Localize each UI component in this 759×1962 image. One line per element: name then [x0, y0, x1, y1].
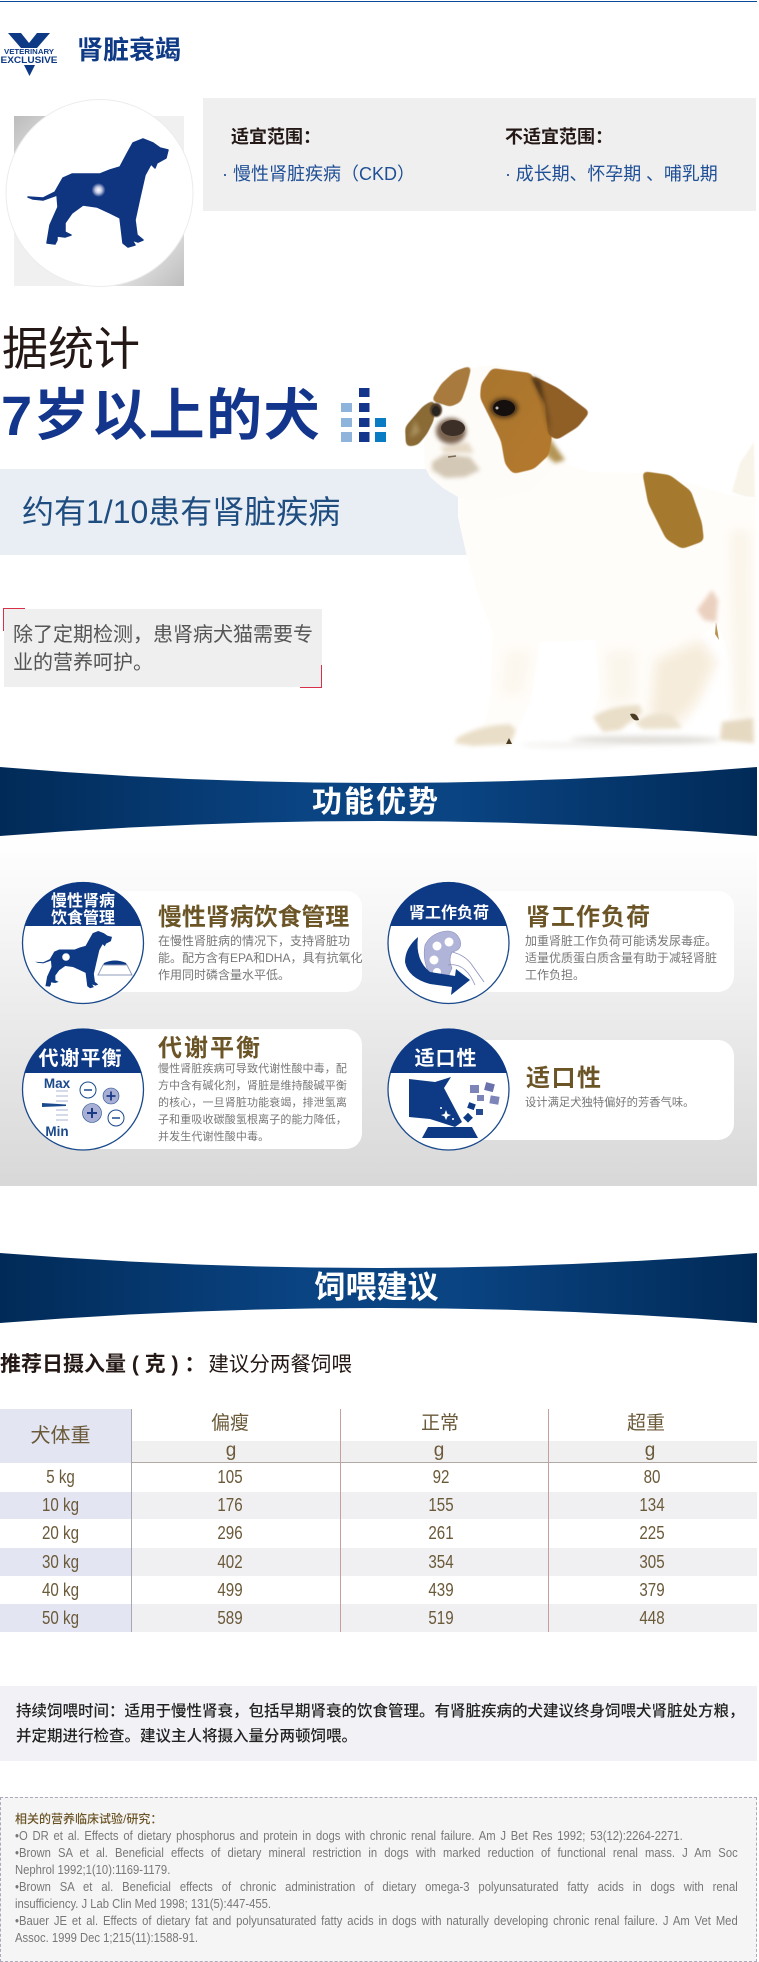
callout text	[13, 624, 313, 674]
row 10 kg	[0, 1492, 757, 1519]
column rule 1	[131, 1409, 132, 1632]
stat band	[0, 469, 480, 555]
panel: function advantages	[0, 838, 757, 1186]
photo: puppy	[404, 366, 756, 748]
card text: 并发生代谢性酸中毒。	[158, 1131, 269, 1143]
reference 3 continued: insufficiency. J Lab Clin Med 1998; 131(5):447-455.	[15, 1897, 271, 1911]
banner: function advantages	[0, 767, 757, 836]
reference 2: •Brown SA et al. Beneficial effects of dietary mineral restriction in dogs with marked reduction of functional renal mass. J Am Soc	[15, 1846, 738, 1860]
reference 2 continued: Nephrol 1992;1(10):1169-1179.	[15, 1863, 170, 1877]
card: palatability	[449, 1040, 734, 1140]
reference 4 continued: Assoc. 1999 Dec 1;215(11):1588-91.	[15, 1931, 198, 1945]
header cell: dog weight	[0, 1409, 131, 1463]
row 40 kg	[42, 1580, 665, 1600]
row 20 kg: 261	[428, 1523, 454, 1543]
row 30 kg: 30 kg	[42, 1552, 79, 1572]
row 50 kg	[0, 1604, 757, 1632]
unit row background	[131, 1441, 757, 1462]
card text: 的核心，一旦肾脏功能衰竭，排泄氢离	[158, 1097, 347, 1109]
heading: not suitable range: 不适宜范围：	[505, 127, 613, 147]
right ear	[528, 373, 590, 440]
row 5 kg: 5 kg	[46, 1467, 75, 1487]
row 5 kg	[46, 1467, 660, 1487]
corner: bottom right	[300, 665, 322, 688]
unit: normal: g	[434, 1440, 444, 1461]
item: not suitable conditions: · 成长期、怀孕期 、哺乳期	[505, 164, 718, 184]
unit: overweight: g	[645, 1440, 655, 1461]
left brown patch	[431, 365, 472, 407]
logo: veterinary exclusive	[0, 33, 58, 76]
body shading	[650, 640, 716, 722]
references heading: 相关的营养临床试验/研究：	[15, 1812, 162, 1826]
card: diet management	[83, 891, 362, 992]
card text	[158, 934, 362, 982]
icon badge: kidney workload	[387, 882, 510, 1004]
row 30 kg: 402	[217, 1552, 243, 1572]
card: kidney workload	[449, 891, 734, 992]
row 10 kg: 155	[428, 1495, 454, 1515]
row 10 kg: 134	[639, 1495, 665, 1515]
row 40 kg: 439	[428, 1580, 454, 1600]
column rule 3	[548, 1409, 549, 1632]
icon badge: palatability: 适口性	[414, 1047, 478, 1070]
icon badge: diet management	[22, 882, 144, 1004]
card text: 方中含有碱化剂，肾脏是维持酸碱平衡	[158, 1080, 347, 1092]
feeding duration text: 持续饲喂时间：适用于慢性肾衰，包括早期肾衰的饮食管理。有肾脏疾病的犬建议终身饲喂犬肾脏处方粮，	[16, 1703, 745, 1720]
unit: lean: g	[226, 1440, 236, 1461]
row 10 kg: 10 kg	[42, 1495, 79, 1515]
item: suitable condition: · 慢性肾脏疾病（CKD）	[222, 164, 415, 184]
icon badge: metabolic balance: Min	[45, 1124, 69, 1139]
column rule 2	[340, 1409, 341, 1632]
card title: 肾工作负荷	[526, 904, 651, 931]
row 10 kg: 176	[217, 1495, 243, 1515]
row 50 kg: 448	[639, 1608, 665, 1628]
banner: function advantages: 功能优势	[312, 786, 440, 819]
icon badge: diet management: 慢性肾病	[51, 891, 115, 910]
title: kidney failure: 肾脏衰竭	[77, 35, 181, 65]
heading: dogs over seven: 7岁以上的犬	[1, 384, 321, 447]
icon badge: kidney workload: 肾工作负荷	[409, 903, 489, 922]
callout text: 业的营养呵护。	[13, 652, 153, 674]
card text: 能。配方含有EPA和DHA，具有抗氧化	[158, 951, 362, 965]
icon badge: metabolic balance	[22, 1028, 144, 1151]
icon badge: palatability	[387, 1028, 510, 1151]
header: lean: 偏瘦	[211, 1413, 249, 1434]
head	[424, 365, 558, 502]
icon: dog silhouette in circle	[6, 99, 194, 287]
row 5 kg: 80	[644, 1467, 660, 1487]
feeding duration text	[16, 1702, 745, 1745]
icon badge: metabolic balance: Max	[44, 1076, 71, 1091]
card title: 代谢平衡	[158, 1035, 262, 1062]
logo: veterinary exclusive: VETERINARY	[4, 47, 54, 56]
stat text: one in ten: 约有1/10患有肾脏疾病	[22, 494, 340, 530]
header cell: dog weight: 犬体重	[30, 1425, 90, 1447]
row 30 kg: 354	[428, 1552, 454, 1572]
paws	[455, 724, 516, 746]
card text: 工作负担。	[525, 968, 585, 982]
heading: recommended daily intake: 推荐日摄入量 ( 克 ) ：建议分两餐饲喂	[0, 1353, 352, 1376]
card text: 设计满足犬独特偏好的芳香气味。	[525, 1097, 694, 1109]
panel: suitability	[203, 98, 756, 211]
back patch	[642, 471, 704, 549]
right brown patch	[480, 368, 552, 474]
nose	[436, 418, 466, 444]
table: feeding amounts	[0, 1409, 757, 1632]
row 20 kg: 225	[639, 1523, 665, 1543]
heading: suitable range: 适宜范围：	[231, 127, 321, 147]
card text: 加重肾脏工作负荷可能诱发尿毒症。	[525, 934, 717, 948]
callout: nutrition care	[3, 608, 322, 688]
row 20 kg: 296	[217, 1523, 243, 1543]
heading: according to statistics: 据统计	[2, 323, 140, 375]
header: normal: 正常	[421, 1413, 459, 1434]
row 30 kg: 305	[639, 1552, 665, 1572]
feeding duration text: 并定期进行检查。建议主人将摄入量分两顿饲喂。	[16, 1728, 357, 1745]
callout text: 除了定期检测，患肾病犬猫需要专	[13, 624, 313, 646]
row 50 kg: 50 kg	[42, 1608, 79, 1628]
banner: feeding advice: 饲喂建议	[314, 1270, 438, 1305]
panel: feeding duration	[0, 1686, 757, 1761]
row 20 kg	[42, 1523, 665, 1543]
icon badge: diet management: 饮食管理	[51, 908, 115, 927]
ground shadow	[570, 736, 720, 744]
panel: references	[0, 1797, 757, 1962]
muzzle fur	[432, 454, 480, 478]
eyes	[490, 398, 518, 418]
icon badge: metabolic balance: 代谢平衡	[38, 1047, 122, 1070]
row 30 kg	[0, 1548, 757, 1576]
callout background	[4, 609, 322, 687]
card text	[525, 934, 717, 982]
row 20 kg: 20 kg	[42, 1523, 79, 1543]
reference 1: •O DR et al. Effects of dietary phosphorus and protein in dogs with chronic renal failure. Am J Bet Res 1992; 53(12):2264-2271.	[15, 1829, 683, 1843]
card title: 适口性	[526, 1065, 602, 1092]
card text: 作用同时磷含量水平低。	[158, 968, 290, 982]
corner: top left	[3, 608, 25, 631]
reference 4: •Bauer JE et al. Effects of dietary fat and polyunsaturated fatty acids in dogs with naturally developing chronic renal failure. J Am Vet Med	[15, 1914, 738, 1928]
row 40 kg: 40 kg	[42, 1580, 79, 1600]
row 5 kg: 105	[217, 1467, 243, 1487]
card text	[158, 1062, 347, 1143]
reference 3: •Brown SA et al. Beneficial effects of chronic administration of dietary omega-3 polyunsaturated fatty acids in dogs with renal	[15, 1880, 738, 1894]
card text: 在慢性肾脏病的情况下，支持肾脏功	[158, 934, 350, 948]
header line	[131, 1462, 757, 1463]
icon: pixel squares	[341, 388, 386, 442]
top rule	[0, 1, 757, 2]
card text: 子和重吸收碳酸氢根离子的能力降低，	[158, 1114, 347, 1126]
neck brown	[546, 436, 565, 463]
row 40 kg: 379	[639, 1580, 665, 1600]
logo: veterinary exclusive: EXCLUSIVE	[0, 55, 58, 66]
row 50 kg: 519	[428, 1608, 454, 1628]
body	[455, 440, 755, 746]
card: metabolic balance	[83, 1029, 362, 1149]
row 5 kg: 92	[433, 1467, 449, 1487]
card text: 慢性肾脏疾病可导致代谢性酸中毒，配	[158, 1063, 347, 1075]
banner: feeding advice	[0, 1253, 757, 1323]
card text: 适量优质蛋白质含量有助于减轻肾脏	[525, 951, 717, 965]
row 40 kg: 499	[217, 1580, 243, 1600]
tail	[732, 442, 755, 500]
row 50 kg: 589	[217, 1608, 243, 1628]
left ear	[405, 399, 435, 447]
card title: 慢性肾病饮食管理	[158, 904, 349, 931]
header: overweight: 超重	[627, 1413, 665, 1434]
